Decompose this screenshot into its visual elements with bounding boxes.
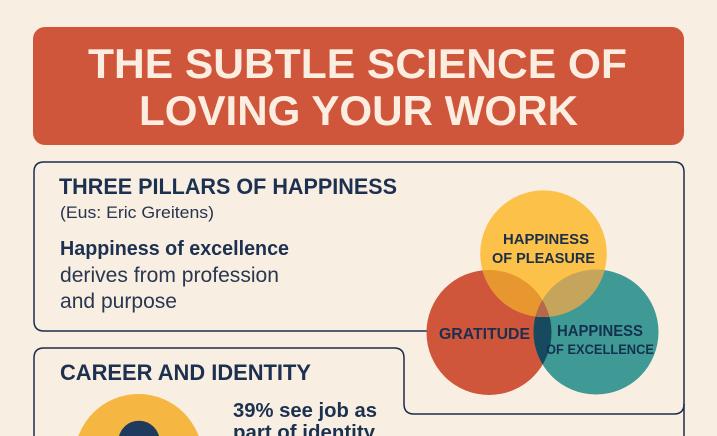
label: happiness of excellence <box>546 323 654 357</box>
circle: excellence <box>534 270 658 394</box>
label: happiness of excellence: OF EXCELLENCE <box>546 341 654 357</box>
label: happiness of pleasure: OF PLEASURE <box>492 250 595 267</box>
circle: gratitude <box>426 270 552 395</box>
text block: happiness of excellence <box>60 238 289 313</box>
heading: career and identity: CAREER AND IDENTITY <box>60 360 311 385</box>
stat text: 39 percent <box>233 400 377 436</box>
panel: three pillars of happiness <box>34 162 684 436</box>
circle: pleasure <box>480 190 607 317</box>
label: happiness of pleasure <box>492 231 595 267</box>
title banner: THE SUBTLE SCIENCE OF <box>88 40 627 87</box>
title banner: LOVING YOUR WORK <box>139 87 578 134</box>
label: happiness of excellence: HAPPINESS <box>557 323 643 340</box>
source note: (Eus: Eric Greitens) <box>60 203 214 222</box>
text block: happiness of excellence: derives from profession <box>60 264 279 287</box>
title banner <box>33 27 684 145</box>
label: gratitude: GRATITUDE <box>439 326 530 343</box>
panel: career and identity <box>34 348 684 436</box>
text block: happiness of excellence: Happiness of excellence <box>60 238 289 260</box>
overlaps with pleasure circle <box>482 270 604 317</box>
heading: three pillars: THREE PILLARS OF HAPPINESS <box>59 174 397 199</box>
venn diagram <box>426 190 658 395</box>
stat text: 39 percent: 39% see job as <box>233 400 377 422</box>
icon: person in circle <box>74 394 202 436</box>
label: happiness of pleasure: HAPPINESS <box>503 231 589 248</box>
centre overlap: red and teal <box>534 316 552 364</box>
text block: happiness of excellence: and purpose <box>60 290 177 313</box>
